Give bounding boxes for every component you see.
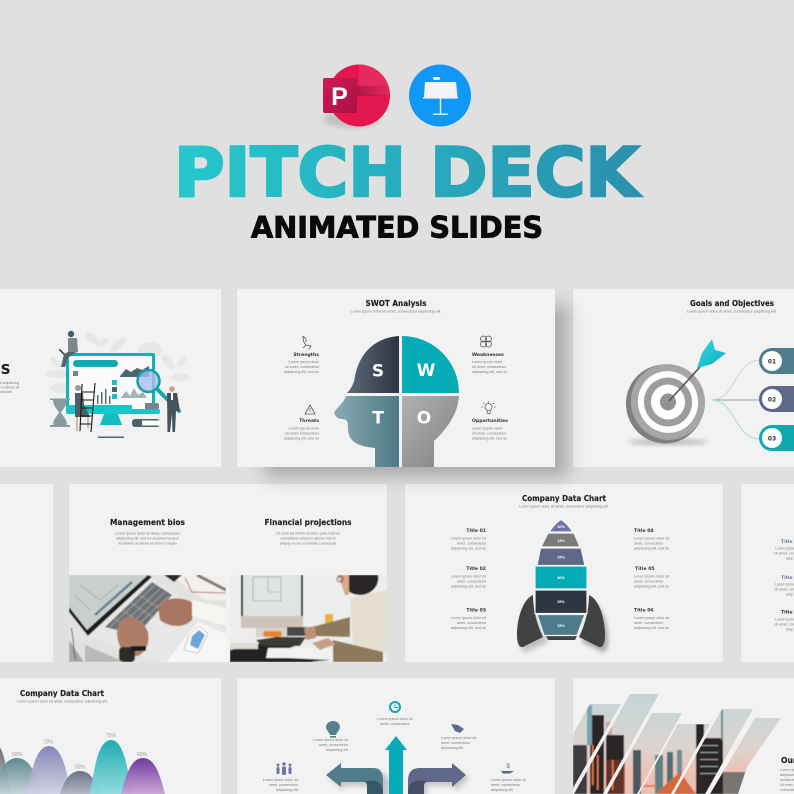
panel: company data bell chart slide: Lorem ipsum dolor sit amet, consectetur adipiscing elit. <box>17 700 108 704</box>
text: weaknesses: adipiscing elit, sed do <box>472 370 507 374</box>
text: title 01: Lorem ipsum dolor sit <box>451 536 486 540</box>
pill 01: 01 <box>768 358 776 366</box>
text: management description: adipiscing elit, sed do eiusmod tempor <box>116 536 180 540</box>
icon: PowerPoint logo: P <box>331 83 348 111</box>
illustration: dashboard with people <box>45 330 189 438</box>
panel: slide fragment with titles: adip <box>786 628 793 632</box>
text: title 04: adipiscing elit, sed do <box>634 546 669 550</box>
standing man <box>167 386 180 432</box>
text: bulb caption: amet, consectetur <box>319 743 349 747</box>
text: financial description: aliquip ex ea commodo consequat <box>280 542 336 546</box>
text: financial description <box>276 532 340 546</box>
text: title 04: Lorem ipsum dolor sit <box>634 536 669 540</box>
icon: money hand: $ <box>506 764 510 770</box>
connector curves <box>712 360 760 439</box>
arrow: left <box>326 763 390 794</box>
text: handshake caption <box>441 736 476 750</box>
pill 03 <box>759 425 794 451</box>
text: people caption: Lorem ipsum dolor sit <box>263 778 298 782</box>
icon: bulb <box>326 721 340 738</box>
text: title 06: Title 06 <box>634 608 654 614</box>
text: weaknesses: Weaknesses <box>472 352 504 358</box>
panel: management and financial slide <box>69 484 387 662</box>
panel: arrows strategy slide <box>237 678 555 794</box>
text: city description <box>780 768 794 792</box>
text: title 03: amet, consectetur <box>457 621 487 625</box>
text: strengths: Strengths <box>293 352 319 358</box>
text: financial description: exercitation ullamco laboris nisi ut <box>280 536 336 540</box>
photo: laptop and hands <box>69 575 226 662</box>
pill 02 <box>759 386 794 412</box>
bell chart: 75% <box>106 733 117 739</box>
text: bulb caption <box>313 738 349 752</box>
woman with ladder <box>75 383 95 432</box>
rocket fins <box>517 595 605 647</box>
text: title 04: amet, consectetur <box>634 542 664 546</box>
text: title 05: Lorem ipsum dolor sit <box>634 574 669 578</box>
text: title 01: Title 01 <box>466 528 486 534</box>
text: money caption: Lorem ipsum dolor sit <box>491 778 526 782</box>
sitting person <box>59 331 78 367</box>
text: strengths: Lorem ipsum dolor <box>288 360 320 364</box>
text: title 03: adipiscing elit, sed do <box>451 626 486 630</box>
text: clock caption: Lorem ipsum dolor sit <box>377 717 413 721</box>
panel: slide fragment with titles: adip <box>786 556 793 560</box>
text: strengths: adipiscing elit, sed do <box>284 370 319 374</box>
heading: SWOT Analysis <box>366 299 427 308</box>
icon: weaknesses links <box>480 336 492 347</box>
text: title 03 <box>451 608 487 630</box>
text: people caption <box>263 778 299 792</box>
photo: person at desk <box>230 575 387 662</box>
panel: SWOT analysis slide: Lorem ipsum dolor sit amet, consectetur adipiscing elit. <box>350 310 442 314</box>
text: money caption <box>491 778 526 792</box>
panel: slide fragment <box>0 484 53 662</box>
text: opportunities: Opportunities <box>472 418 508 424</box>
panel: slide fragment with titles <box>741 484 794 662</box>
panel: slide fragment with titles: Title <box>781 610 793 616</box>
text: people caption: amet, consectetur <box>269 783 299 787</box>
text: opportunities: sit amet, consectetur <box>472 432 507 436</box>
arrow: up <box>385 736 407 794</box>
quadrant S: S <box>372 362 384 382</box>
icon: people <box>276 762 292 775</box>
text: threats: adipiscing elit, sed do <box>284 436 319 440</box>
heading: Financial projections: Financial projections <box>264 518 352 527</box>
subtitle: ANIMATED SLIDES <box>251 210 543 244</box>
pill 03: 03 <box>768 436 776 442</box>
text: financial description: Ut enim ad minim veniam, quis nostrud <box>276 532 340 536</box>
text: management description <box>115 532 181 546</box>
text: title 06: Lorem ipsum dolor sit <box>634 616 669 620</box>
text: title 02: Title 02 <box>466 566 486 572</box>
head diagram <box>334 336 459 467</box>
text: money caption: amet, consectetur <box>491 783 521 787</box>
arrow in target <box>669 339 726 401</box>
panel: slide fragment with titles: Title <box>781 539 793 545</box>
text: title 06 <box>634 608 669 630</box>
rocket chart <box>517 520 608 652</box>
panel: company data bell chart slide <box>0 678 221 794</box>
text: opportunities: Lorem ipsum dolor <box>472 426 503 430</box>
text: title 04: Title 04 <box>634 528 654 534</box>
text: title 05 <box>634 566 669 588</box>
text: threats: Threats <box>299 418 319 424</box>
title: PITCH DECK <box>174 134 641 213</box>
panel: goals and objectives slide: Lorem ipsum dolor sit amet, consectetur adipiscing elit. <box>687 310 777 314</box>
text: weaknesses: sit amet, consectetur <box>472 365 507 369</box>
panel: analysis illustration slide <box>0 289 221 467</box>
panel: analysis illustration slide: ut labore et <box>1 386 19 390</box>
heading: Company Data Chart <box>522 494 606 503</box>
quadrant O: O <box>417 408 431 428</box>
text: clock caption <box>377 717 413 726</box>
icon: handshake <box>451 724 464 733</box>
icon: clock phone <box>390 702 400 712</box>
text: title 06: adipiscing elit, sed do <box>634 626 669 630</box>
text: bulb caption: adipiscing elit <box>326 748 348 752</box>
text: handshake caption: adipiscing elit <box>441 746 463 750</box>
panel: city slide <box>573 678 794 794</box>
text: title 06: amet, consectetur <box>634 621 664 625</box>
text: title 02 <box>451 566 487 588</box>
text: clock caption: amet, consectetur <box>380 722 410 726</box>
icon: money hand <box>501 764 514 774</box>
text: threats <box>284 418 320 440</box>
arrow: right <box>408 763 469 794</box>
panel: slide fragment with titles: adip <box>786 592 793 596</box>
segment 13%: 13% <box>557 539 565 543</box>
icon: opportunities bulb <box>482 401 496 414</box>
text: weaknesses: Lorem ipsum dolor <box>472 360 503 364</box>
panel: rocket company data chart slide <box>405 484 723 662</box>
text: title 03: Lorem ipsum dolor sit <box>451 616 486 620</box>
text: management description: Lorem ipsum dolor sit amet, consectetur <box>115 532 181 536</box>
text: title 01: amet, consectetur <box>457 542 487 546</box>
text: strengths <box>284 352 320 374</box>
photo: slanted city bands <box>573 690 783 794</box>
segment 15%: 15% <box>557 556 565 560</box>
heading: Goals and Objectives <box>690 299 774 308</box>
bell chart: 50% <box>75 764 86 770</box>
pill 01 <box>759 348 794 374</box>
text: title 04 <box>634 528 669 550</box>
text: title 02: amet, consectetur <box>457 580 487 584</box>
panel: slide fragment with titles: Title <box>781 575 793 581</box>
heading: Management bios: Management bios <box>110 518 185 527</box>
text: title 05: adipiscing elit, sed do <box>634 584 669 588</box>
segment 25%: 25% <box>557 600 565 604</box>
text: title 02: adipiscing elit, sed do <box>451 584 486 588</box>
bell chart: 70% <box>43 740 54 746</box>
panel: goals and objectives slide <box>573 289 794 467</box>
text: management description: incididunt ut labore et dolore magna <box>118 542 178 546</box>
target <box>616 354 715 454</box>
text: strengths: sit amet, consectetur <box>285 365 320 369</box>
text: threats: Lorem ipsum dolor <box>288 426 320 430</box>
text: money caption: adipiscing elit <box>491 788 513 792</box>
icon: PowerPoint logo <box>323 64 390 128</box>
bell chart: 60% <box>12 752 23 758</box>
text: opportunities <box>472 418 508 440</box>
segment 30%: 30% <box>557 576 565 580</box>
text: people caption: adipiscing elit <box>276 788 298 792</box>
panel: SWOT analysis slide <box>237 289 568 477</box>
text: weaknesses <box>472 352 507 374</box>
quadrant W: W <box>417 361 436 381</box>
bell chart <box>0 733 165 794</box>
text: handshake caption: Lorem ipsum dolor sit <box>441 736 476 740</box>
text: opportunities: adipiscing elit, sed do <box>472 436 507 440</box>
text: title 03: Title 03 <box>466 608 486 614</box>
icon: Keynote logo <box>409 64 471 126</box>
text: title 05: Title 05 <box>635 566 655 572</box>
text: title 02: Lorem ipsum dolor sit <box>451 574 486 578</box>
hourglass <box>50 398 70 427</box>
panel: rocket company data chart slide: Lorem ipsum dolor sit amet, consectetur adipiscing elit. <box>519 504 609 508</box>
text: title 05: amet, consectetur <box>634 580 664 584</box>
icon: strengths arm <box>303 336 311 349</box>
heading: Company Data Chart <box>20 689 104 698</box>
text: title 01: adipiscing elit, sed do <box>451 546 486 550</box>
segment 15% lower: 15% <box>557 624 565 628</box>
quadrant T: T <box>372 408 384 428</box>
text: title 01 <box>451 528 487 550</box>
text: threats: sit amet, consectetur <box>285 432 320 436</box>
text: handshake caption: amet, consectetur <box>441 741 471 745</box>
bell chart: 60% <box>137 752 148 758</box>
icon: threats triangle <box>305 405 315 414</box>
pill 02: 02 <box>768 396 776 404</box>
text: bulb caption: Lorem ipsum dolor sit <box>313 738 348 742</box>
segment 10%: 10% <box>557 525 565 529</box>
